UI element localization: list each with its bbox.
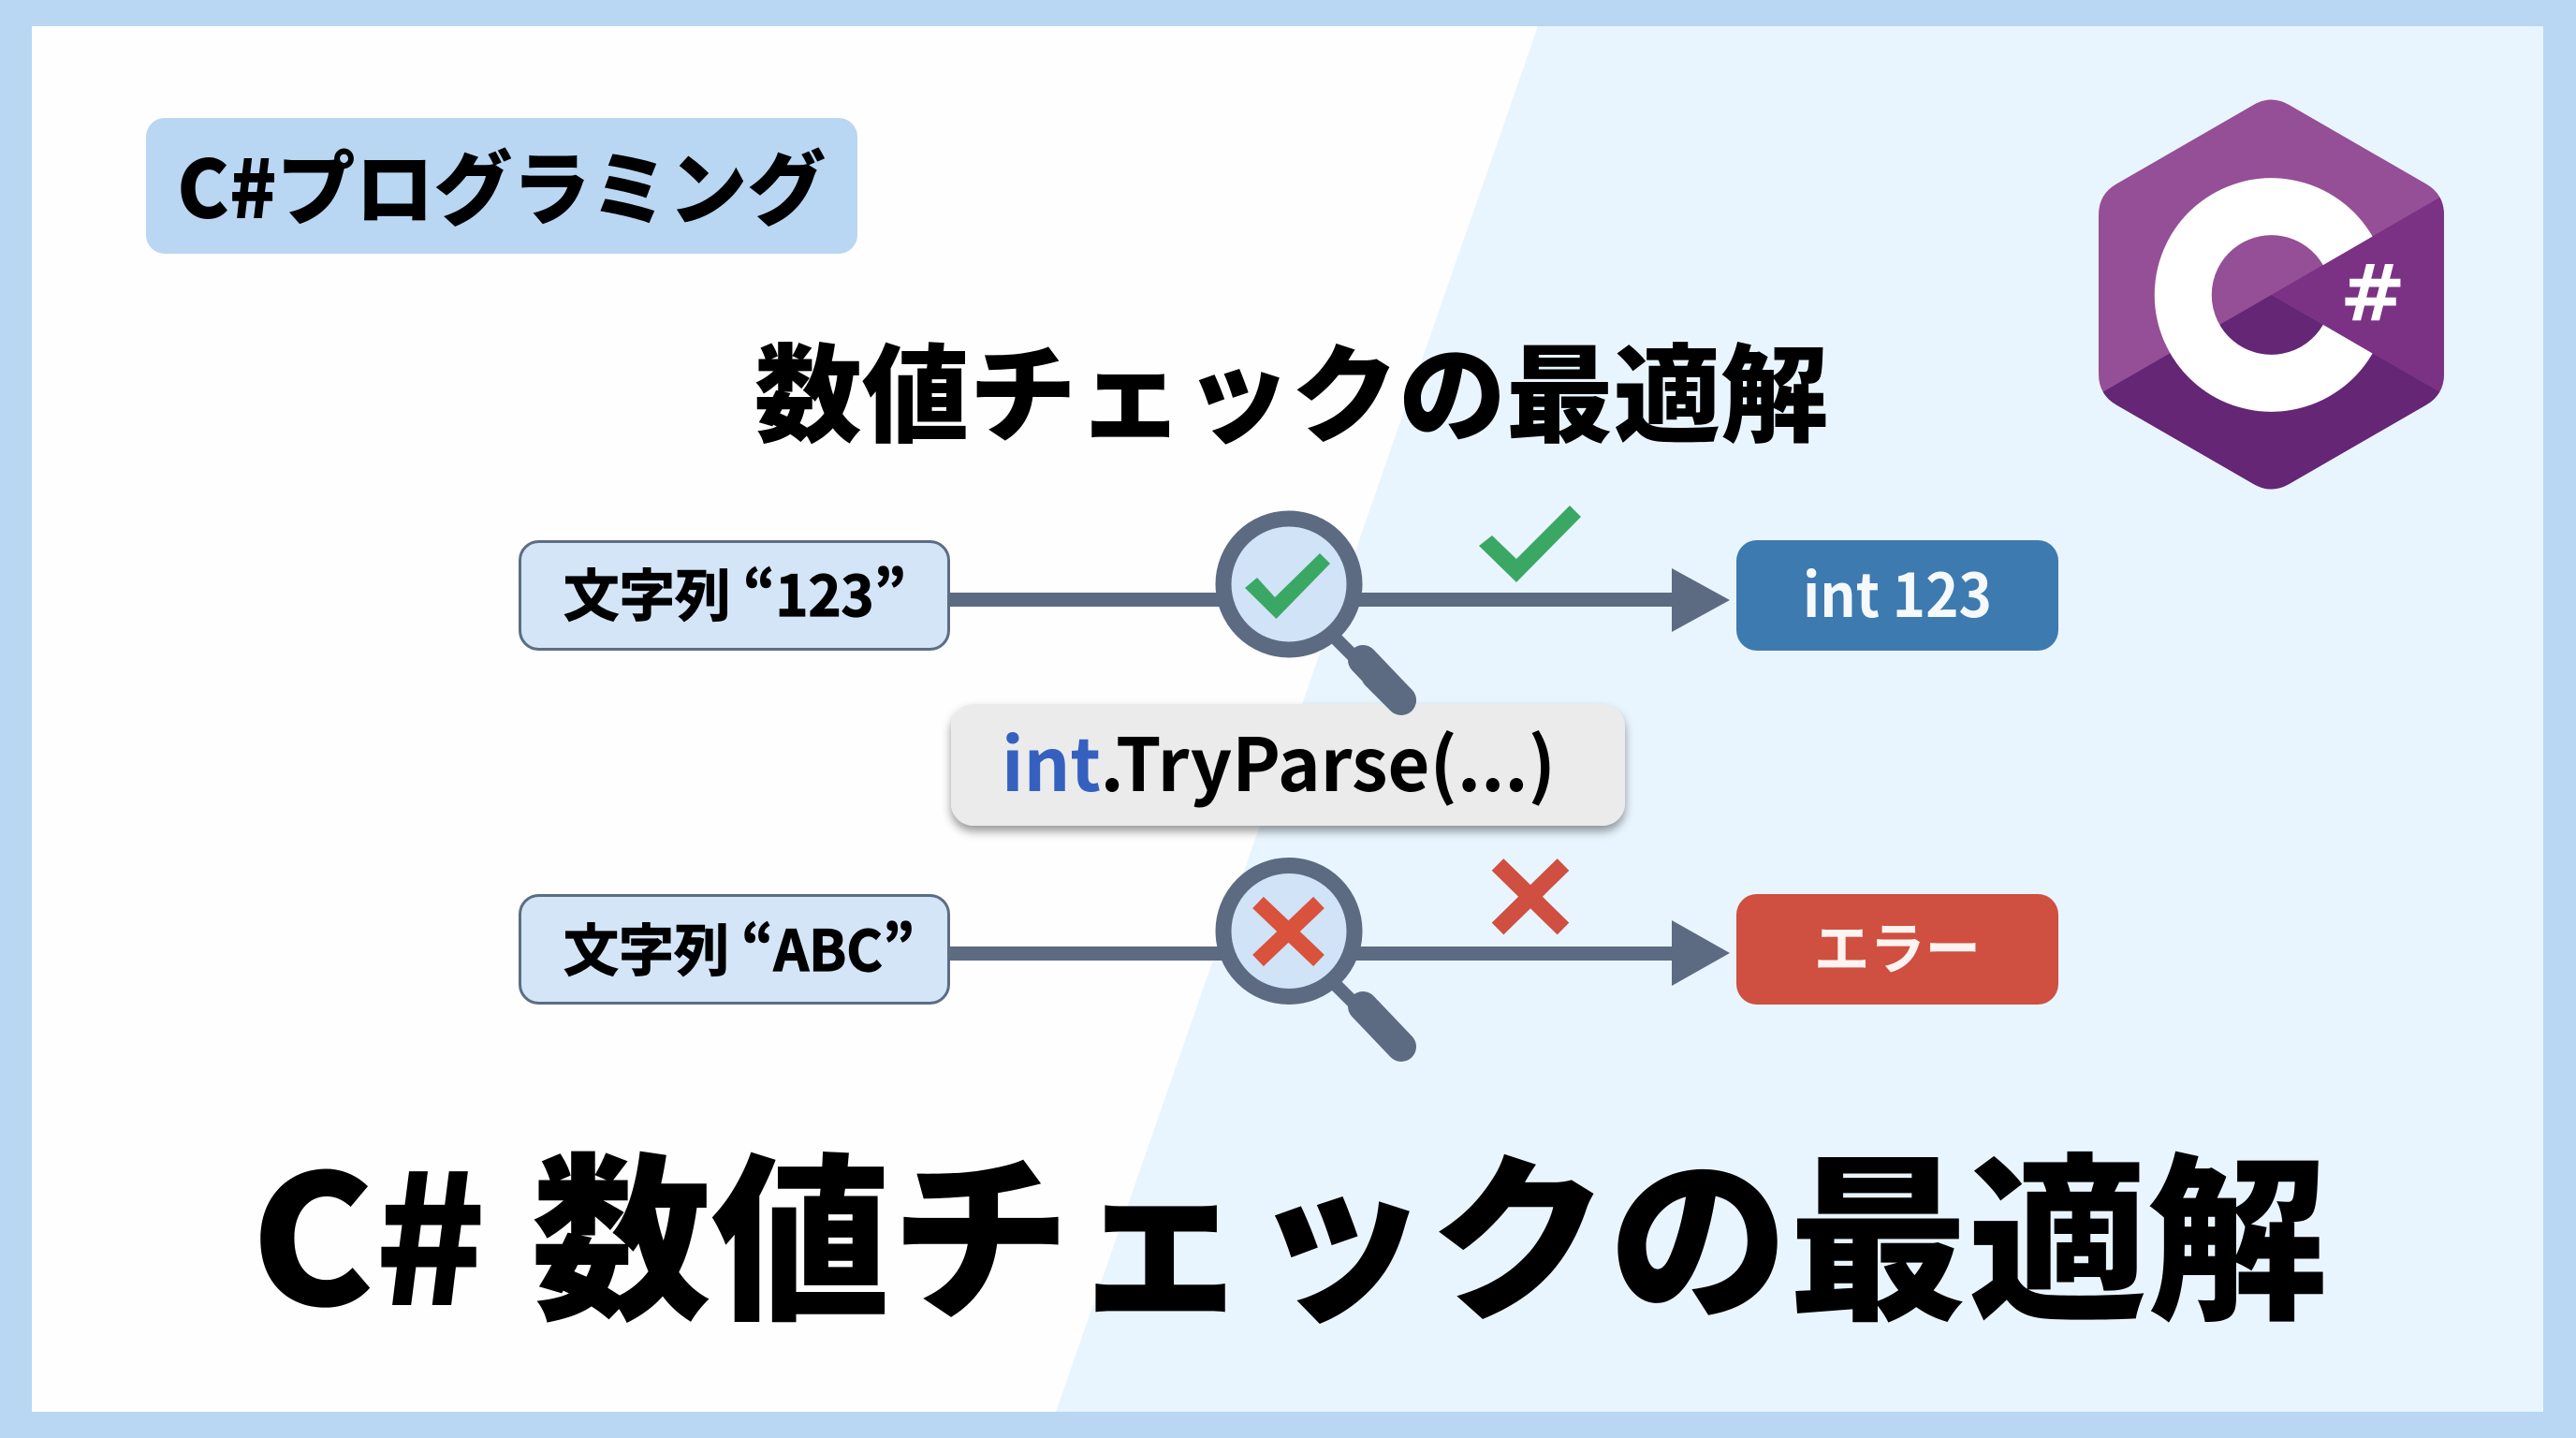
input box: string 123: 文字列 “123” — [564, 551, 906, 633]
flow row 1: valid string — [520, 506, 2058, 700]
code label: int.TryParse: int.TryParse(...) — [1002, 708, 1556, 813]
main title: C# — [251, 1097, 487, 1357]
icon: green check — [1479, 506, 1581, 582]
subtitle: 数値チェックの最適解 — [754, 310, 1828, 464]
badge: C# programming: C#プログラミング — [177, 125, 826, 242]
output box: int 123: int 123 — [1803, 549, 1992, 635]
icon: magnifier with check — [1223, 519, 1401, 700]
arrow: success path — [950, 568, 1730, 632]
input box: string 123 — [520, 541, 949, 650]
icon: C# logo — [2099, 99, 2444, 489]
output box: error: エラー — [1814, 904, 1981, 986]
flow row 2: invalid string — [520, 865, 2058, 1047]
handle overlap: magnifier handle tip over code label — [1376, 675, 1401, 700]
main title: 数値チェックの最適解 — [532, 1097, 2327, 1357]
icon: magnifier with cross — [1223, 865, 1401, 1047]
input box: string ABC: 文字列 “ABC” — [564, 906, 915, 988]
arrow: failure path — [950, 920, 1730, 986]
input box: string ABC — [520, 895, 949, 1004]
icon: C# logo: # — [2340, 247, 2406, 339]
icon: red cross — [1498, 865, 1563, 929]
output box: int 123 — [1736, 540, 2058, 651]
output box: error — [1736, 894, 2058, 1005]
